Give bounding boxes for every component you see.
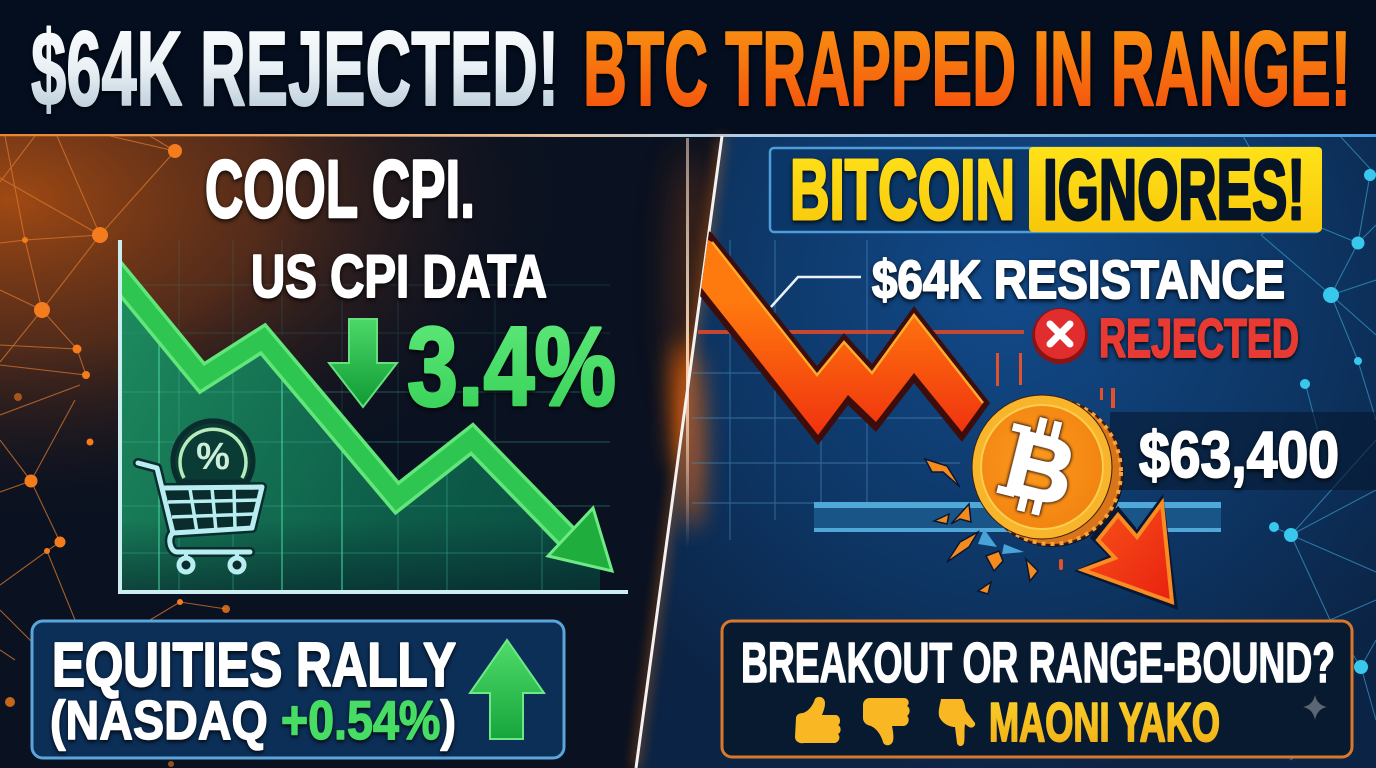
stat: 3.4%: 3.4% <box>407 304 616 429</box>
text: maoni yako: MAONI YAKO <box>989 691 1220 753</box>
text: price: $63,400 <box>1139 418 1339 491</box>
icon: thumbs down <box>863 698 910 745</box>
icon: rejected x <box>1032 308 1088 364</box>
network: blue nodes <box>1243 136 1376 760</box>
price line arrow <box>700 226 990 445</box>
text: us cpi data: US CPI DATA <box>251 243 547 310</box>
panel: question <box>722 621 1352 757</box>
shards <box>925 459 1038 594</box>
resistance line <box>698 330 1024 334</box>
icon: thumbs up <box>795 697 841 743</box>
chart axes <box>120 240 628 592</box>
text: 64k resistance: $64K RESISTANCE <box>872 250 1285 310</box>
heading: bitcoin ignores <box>770 143 1322 238</box>
green arrowhead <box>548 508 612 571</box>
chart area fill <box>122 280 600 592</box>
panel: left <box>0 136 720 767</box>
panel divider <box>636 136 722 768</box>
panel: equities rally <box>32 621 564 758</box>
impact ticks <box>996 353 1115 570</box>
icon: bitcoin coin <box>972 395 1124 547</box>
text: equities rally: EQUITIES RALLY <box>52 631 456 700</box>
icon: shopping cart with percent: % <box>196 436 230 478</box>
icon: up arrow <box>470 640 544 739</box>
vertical seam <box>686 138 689 548</box>
icon: pointing down <box>939 699 975 746</box>
icon: sparkle <box>1303 695 1327 720</box>
chart grid <box>120 240 610 590</box>
text: nasdaq change: (NASDAQ +0.54%) <box>50 689 456 751</box>
icon: shopping cart with percent <box>138 421 262 572</box>
bitcoin glyph: B <box>996 411 1085 526</box>
header band <box>0 0 1376 135</box>
icon: down arrow <box>329 319 397 407</box>
header rule <box>0 134 1376 138</box>
panel: right <box>630 136 1376 768</box>
title <box>31 10 1351 128</box>
icon: red down arrow <box>1074 494 1178 610</box>
title: $64K REJECTED! <box>31 10 559 128</box>
heading: cool cpi: COOL CPI. <box>205 144 475 235</box>
heading: bitcoin ignores: BITCOIN <box>790 143 1015 238</box>
green line <box>110 266 578 548</box>
price band <box>1110 412 1376 490</box>
support bar <box>814 502 1221 532</box>
leader line <box>771 277 861 307</box>
network: orange nodes <box>0 136 230 767</box>
chart grid: right <box>692 240 960 540</box>
chart: falling cpi <box>110 240 628 592</box>
